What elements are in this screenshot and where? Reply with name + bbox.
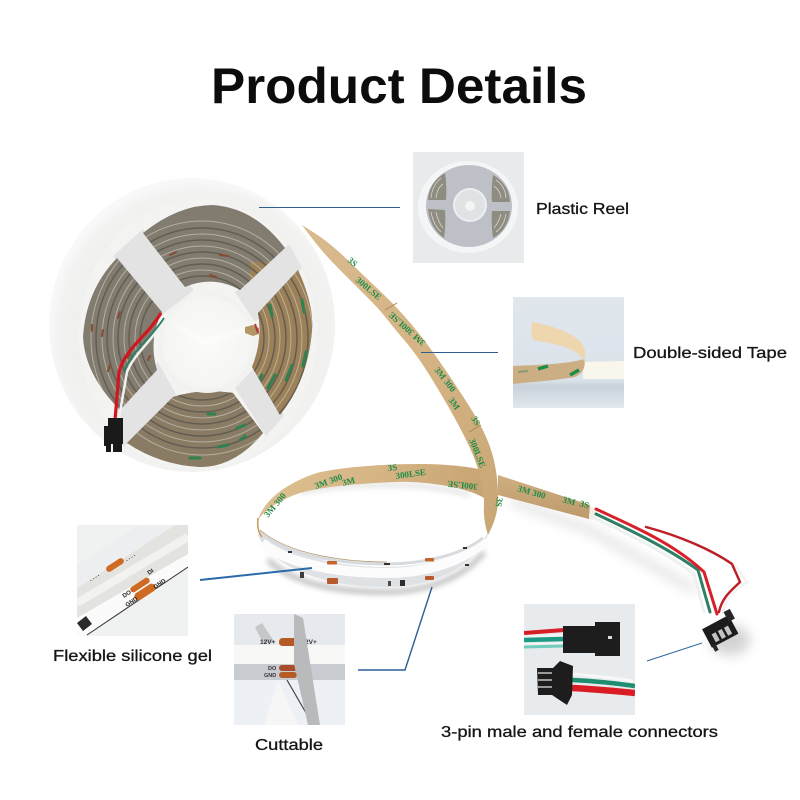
thumbnail: connectors (524, 604, 635, 715)
label: double-sided tape: Double-sided Tape (633, 345, 787, 362)
leader line: silicone gel (200, 568, 312, 580)
reel wires (119, 318, 165, 418)
silicone strip front of loop (258, 530, 490, 587)
printed 3M tape marks: 3M 300 (313, 471, 344, 491)
printed 3M tape marks: 3M 300 (432, 365, 458, 394)
thumbnail: flexible silicone gel: GND (125, 596, 140, 609)
loop ribbon back (258, 464, 484, 520)
strip wires (594, 509, 747, 614)
thumbnail: cuttable strip: 12V+ (260, 639, 276, 646)
leader line: cuttable (358, 587, 432, 670)
thumbnail: cuttable strip (234, 614, 345, 725)
printed 3M tape marks: 3M 300 (262, 490, 288, 519)
tape end tucked at hub (245, 325, 259, 336)
reel hub (159, 293, 255, 393)
printed 3M tape marks: 3S (493, 497, 505, 508)
strip connector (700, 609, 744, 652)
label: flexible silicone gel: Flexible silicone gel (53, 648, 212, 665)
printed 3M tape marks: 3M 300LSE (387, 310, 427, 348)
leader line: connectors (647, 643, 702, 661)
printed 3M tape marks: 3M (341, 475, 357, 488)
leader line: plastic reel (259, 206, 400, 208)
thumbnail: flexible silicone gel: DO (122, 590, 133, 600)
reel outer flange (49, 178, 335, 472)
plastic reel with wound strip (49, 178, 335, 472)
printed 3M tape marks: 3M 300 (516, 483, 547, 501)
loop shadow (268, 552, 484, 592)
printed 3M tape marks: 3S (578, 498, 590, 511)
printed 3M tape marks: 300LSE (354, 275, 384, 302)
printed 3M tape marks (262, 255, 590, 519)
thumbnail: flexible silicone gel: GND (153, 578, 168, 591)
printed 3M tape marks: 3S (469, 414, 483, 427)
thumbnail: cuttable strip: DO (268, 666, 277, 672)
printed 3M tape marks: 300LSE (447, 479, 478, 492)
printed 3M tape marks: 3S (387, 462, 398, 473)
descending ribbon (302, 225, 498, 535)
reel connector (104, 418, 123, 452)
thumbnail: plastic reel (413, 152, 524, 263)
thumbnail: flexible silicone gel: DI (147, 568, 155, 577)
printed 3M tape marks: 300LSE (467, 437, 488, 469)
printed 3M tape marks: 3M (446, 395, 462, 412)
title: Product Details (211, 58, 587, 114)
printed 3M tape marks: 3S (346, 255, 359, 269)
thumbnail: cuttable strip: GND (264, 673, 276, 679)
thumbnail: flexible silicone gel: - - - - (89, 573, 101, 584)
printed 3M tape marks: 3M (561, 494, 577, 508)
label: cuttable: Cuttable (255, 737, 323, 754)
strip solder pads and chips (288, 547, 469, 586)
thumbnail: flexible silicone gel: - - - - (125, 553, 137, 564)
thumbnail: flexible silicone gel (77, 525, 188, 636)
ribbon tail to wires (498, 475, 590, 519)
printed 3M tape marks: 300LSE (395, 467, 426, 481)
connector shadow (710, 625, 750, 655)
adhesive ribbon with wires (258, 225, 750, 655)
wound tape windows (80, 200, 320, 470)
label: connectors: 3-pin male and female connectors (441, 724, 718, 741)
leader line: double-sided tape (421, 352, 498, 354)
thumbnail: double-sided tape (513, 297, 624, 408)
label: plastic reel: Plastic Reel (536, 201, 629, 218)
thumbnail: cuttable strip: 2V+ (305, 639, 317, 646)
reel spokes (113, 229, 302, 447)
